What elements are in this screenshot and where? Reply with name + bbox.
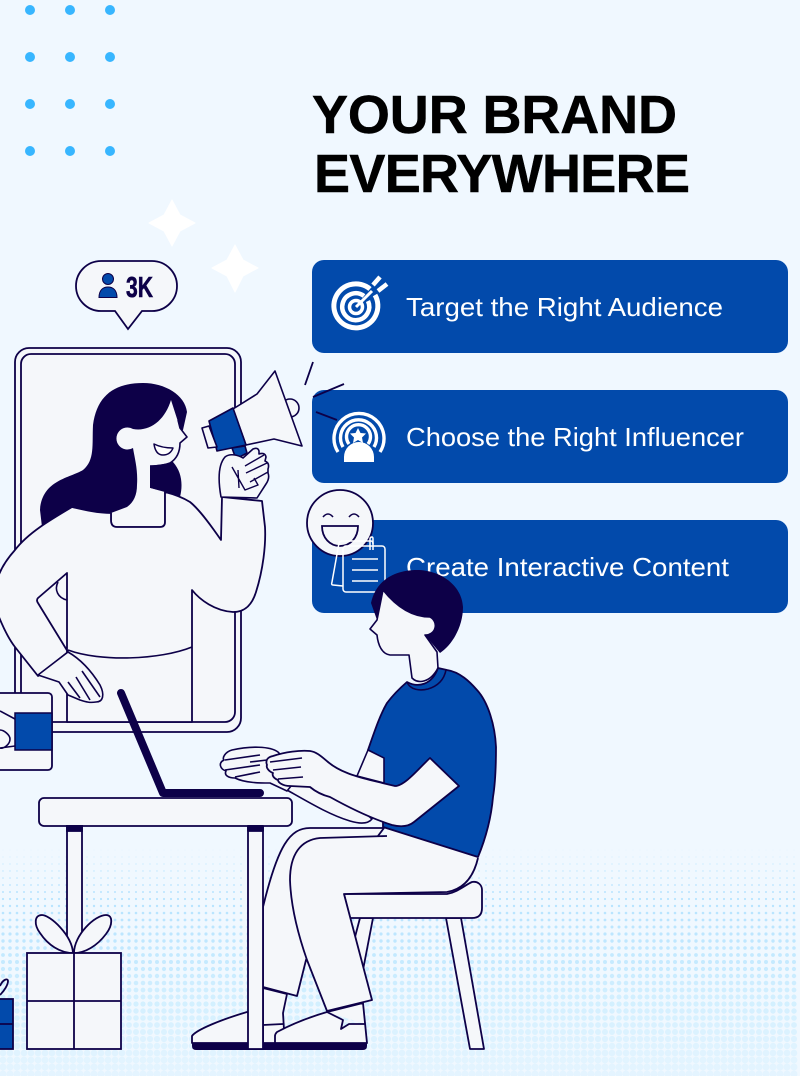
left hand xyxy=(38,652,103,702)
hair xyxy=(371,570,463,653)
front leg outline xyxy=(290,836,478,1011)
panel: choose the right influencer xyxy=(312,390,788,483)
label: Target the Right Audience xyxy=(406,292,723,322)
sweater details xyxy=(56,582,192,658)
title: EVERYWHERE xyxy=(314,144,690,204)
icon: sparkles xyxy=(149,200,258,292)
decorative dot grid xyxy=(25,5,115,156)
near hand fingers xyxy=(270,758,303,779)
follower number: 3K xyxy=(126,272,153,304)
chair xyxy=(344,882,484,1049)
far hand fingers xyxy=(225,755,267,777)
icon: megaphone xyxy=(202,371,302,459)
halftone dot background xyxy=(3,850,800,1074)
sweater xyxy=(0,492,265,722)
t-shirt collar xyxy=(407,670,446,690)
desk leg front xyxy=(248,826,263,1049)
front leg xyxy=(290,827,478,1011)
far hand xyxy=(220,747,300,791)
desk xyxy=(39,798,292,956)
label: Choose the Right Influencer xyxy=(406,422,744,452)
hair xyxy=(40,383,187,527)
gift box large xyxy=(27,915,121,1049)
shoe sole xyxy=(192,1043,367,1050)
face and neck xyxy=(111,400,187,527)
woman influencer xyxy=(0,371,302,722)
panel: create interactive content xyxy=(312,520,788,613)
far forearm xyxy=(287,775,372,823)
front shoe xyxy=(275,1003,367,1043)
icon: target xyxy=(334,277,387,328)
phone frame xyxy=(15,348,241,732)
back leg and shoe xyxy=(192,828,384,1043)
laptop xyxy=(121,693,260,793)
panel: target the right audience xyxy=(312,260,788,353)
title xyxy=(312,85,690,204)
icon: document xyxy=(332,537,385,592)
sound lines xyxy=(305,362,344,420)
title: YOUR BRAND xyxy=(312,85,677,145)
label: Create Interactive Content xyxy=(406,552,730,582)
gift box small xyxy=(0,979,13,1049)
head and neck xyxy=(370,590,438,681)
icon: person xyxy=(99,274,117,298)
t-shirt xyxy=(368,668,496,857)
near arm and hand xyxy=(266,751,459,826)
far arm xyxy=(357,750,384,783)
icon: smiley xyxy=(307,490,373,556)
speech bubble: follower count xyxy=(76,261,177,329)
right hand xyxy=(219,448,269,498)
icon: influencer xyxy=(334,413,384,462)
mouth xyxy=(154,444,173,455)
left box with band xyxy=(0,693,52,770)
man working at laptop xyxy=(192,570,496,1050)
